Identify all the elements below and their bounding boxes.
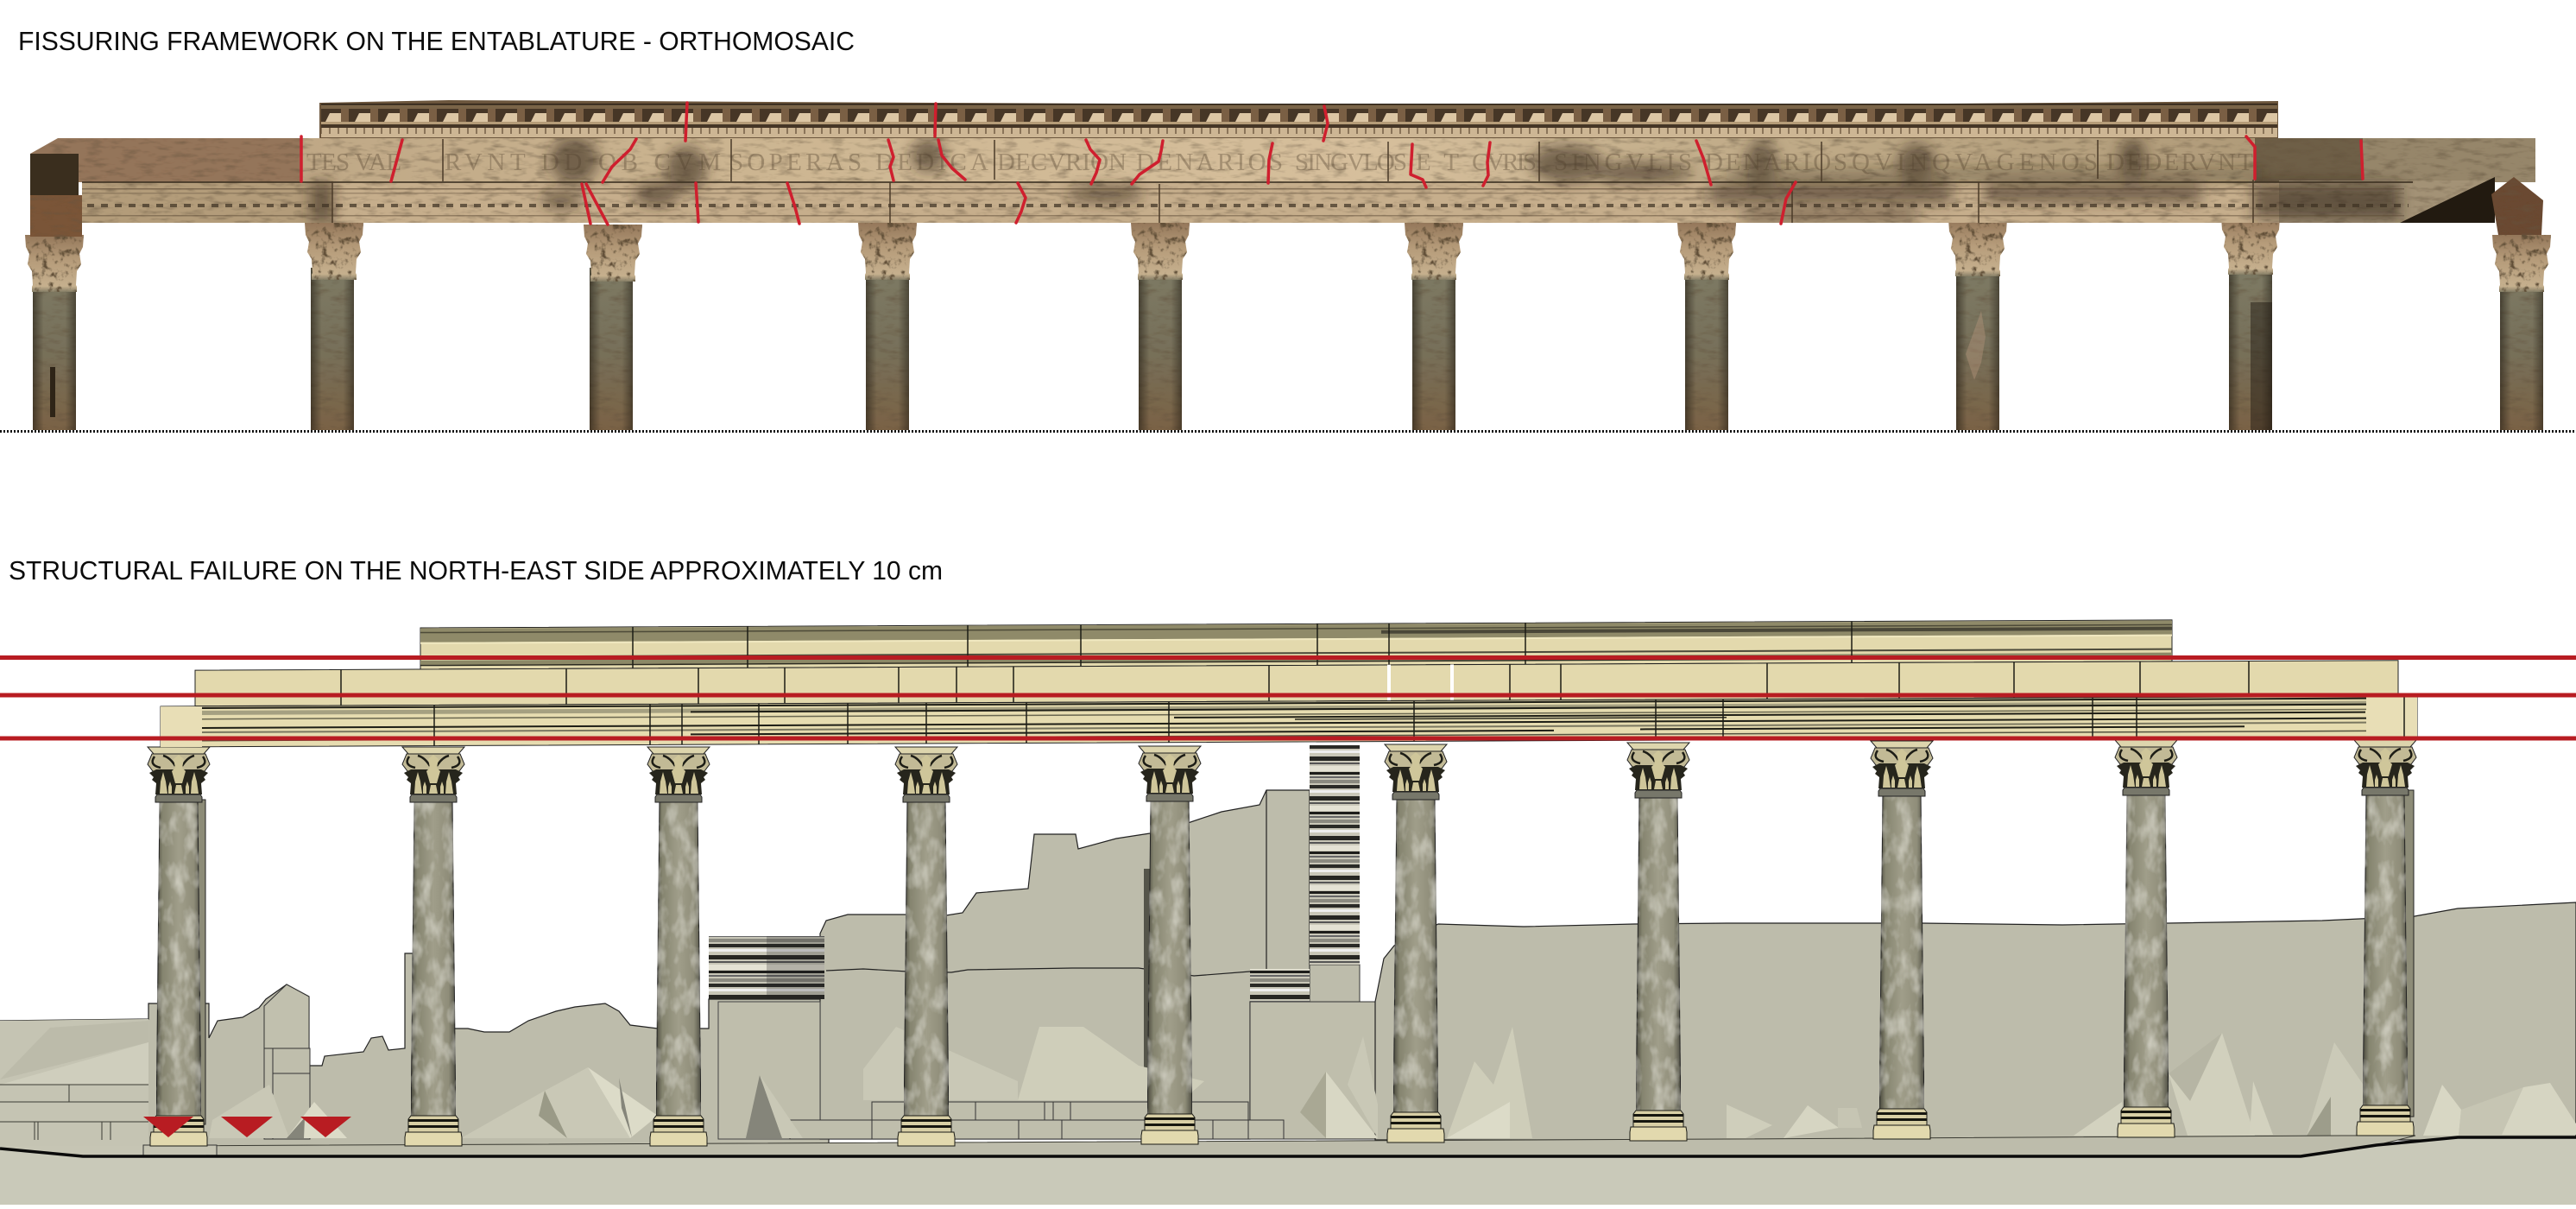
faceted terrain spikes bbox=[209, 1027, 2576, 1138]
corner back columns bbox=[192, 790, 2414, 1124]
background terrain: left bbox=[0, 953, 829, 1149]
frieze and architrave bbox=[30, 136, 2535, 223]
architrave fascia lines bbox=[82, 181, 2413, 216]
inscription: RVNT DD OB CVM bbox=[445, 149, 721, 176]
panel: orthomosaic colonnade bbox=[0, 100, 2576, 432]
inscription: SOPERAS DEDICA bbox=[729, 149, 988, 176]
panel: structural failure elevation bbox=[0, 618, 2576, 1205]
restored entablature bbox=[161, 618, 2417, 747]
inscription: SINGVLIS bbox=[1554, 149, 1692, 176]
column 5 bbox=[1139, 746, 1201, 1144]
low terrain masses bbox=[790, 1027, 1284, 1139]
upper cornice bbox=[319, 100, 2278, 138]
column capitals bbox=[25, 218, 2551, 292]
title: orthomosaic section: FISSURING FRAMEWORK ON THE ENTABLATURE - ORTHOMOSAIC bbox=[18, 26, 855, 56]
water stains bbox=[311, 136, 2400, 223]
striped blocks bbox=[709, 745, 1360, 1002]
brick pier ends bbox=[30, 177, 2543, 237]
inscription: DEDERVNT bbox=[2106, 149, 2253, 176]
inscription: CVRIS bbox=[1472, 149, 1537, 176]
title: structural failure section: STRUCTURAL FAILURE ON THE NORTH-EAST SIDE APPROXIMATELY 10 cm bbox=[9, 555, 943, 586]
ground datum: dotted line bbox=[0, 430, 2576, 433]
cornice band bbox=[420, 620, 2172, 669]
inscription bbox=[306, 149, 2253, 176]
moulded architrave band bbox=[161, 696, 2417, 747]
columns bbox=[148, 740, 2416, 1146]
inscription: QVINQVAGENOS bbox=[1852, 149, 2098, 176]
column 8 bbox=[1871, 741, 1933, 1139]
red fissure lines bbox=[301, 103, 2363, 225]
ground and platform bbox=[0, 1136, 2576, 1205]
column shafts bbox=[33, 268, 2543, 430]
inscription: DECVRION bbox=[997, 149, 1127, 176]
column 1 bbox=[148, 747, 210, 1146]
red settlement markers bbox=[143, 1117, 351, 1137]
inscription: DENARIOS bbox=[1136, 149, 1283, 176]
column 7 bbox=[1627, 743, 1689, 1141]
column 6 bbox=[1385, 744, 1447, 1143]
background terrain: centre bbox=[718, 790, 1375, 1139]
column 9 bbox=[2115, 740, 2177, 1137]
background terrain: right bbox=[1375, 902, 2576, 1140]
red displacement lines bbox=[0, 655, 2576, 741]
inscription: DENARIOS bbox=[1705, 149, 1847, 176]
plain frieze band bbox=[195, 660, 2398, 706]
inscription: ET bbox=[1416, 149, 1459, 176]
column 3 bbox=[647, 747, 710, 1146]
inscription: TES VAE bbox=[306, 149, 401, 176]
column 10 bbox=[2354, 740, 2416, 1136]
column 4 bbox=[895, 747, 957, 1146]
block joints bbox=[332, 139, 2253, 223]
inscription: SINGVLOS bbox=[1295, 149, 1407, 176]
column 2 bbox=[402, 747, 464, 1146]
